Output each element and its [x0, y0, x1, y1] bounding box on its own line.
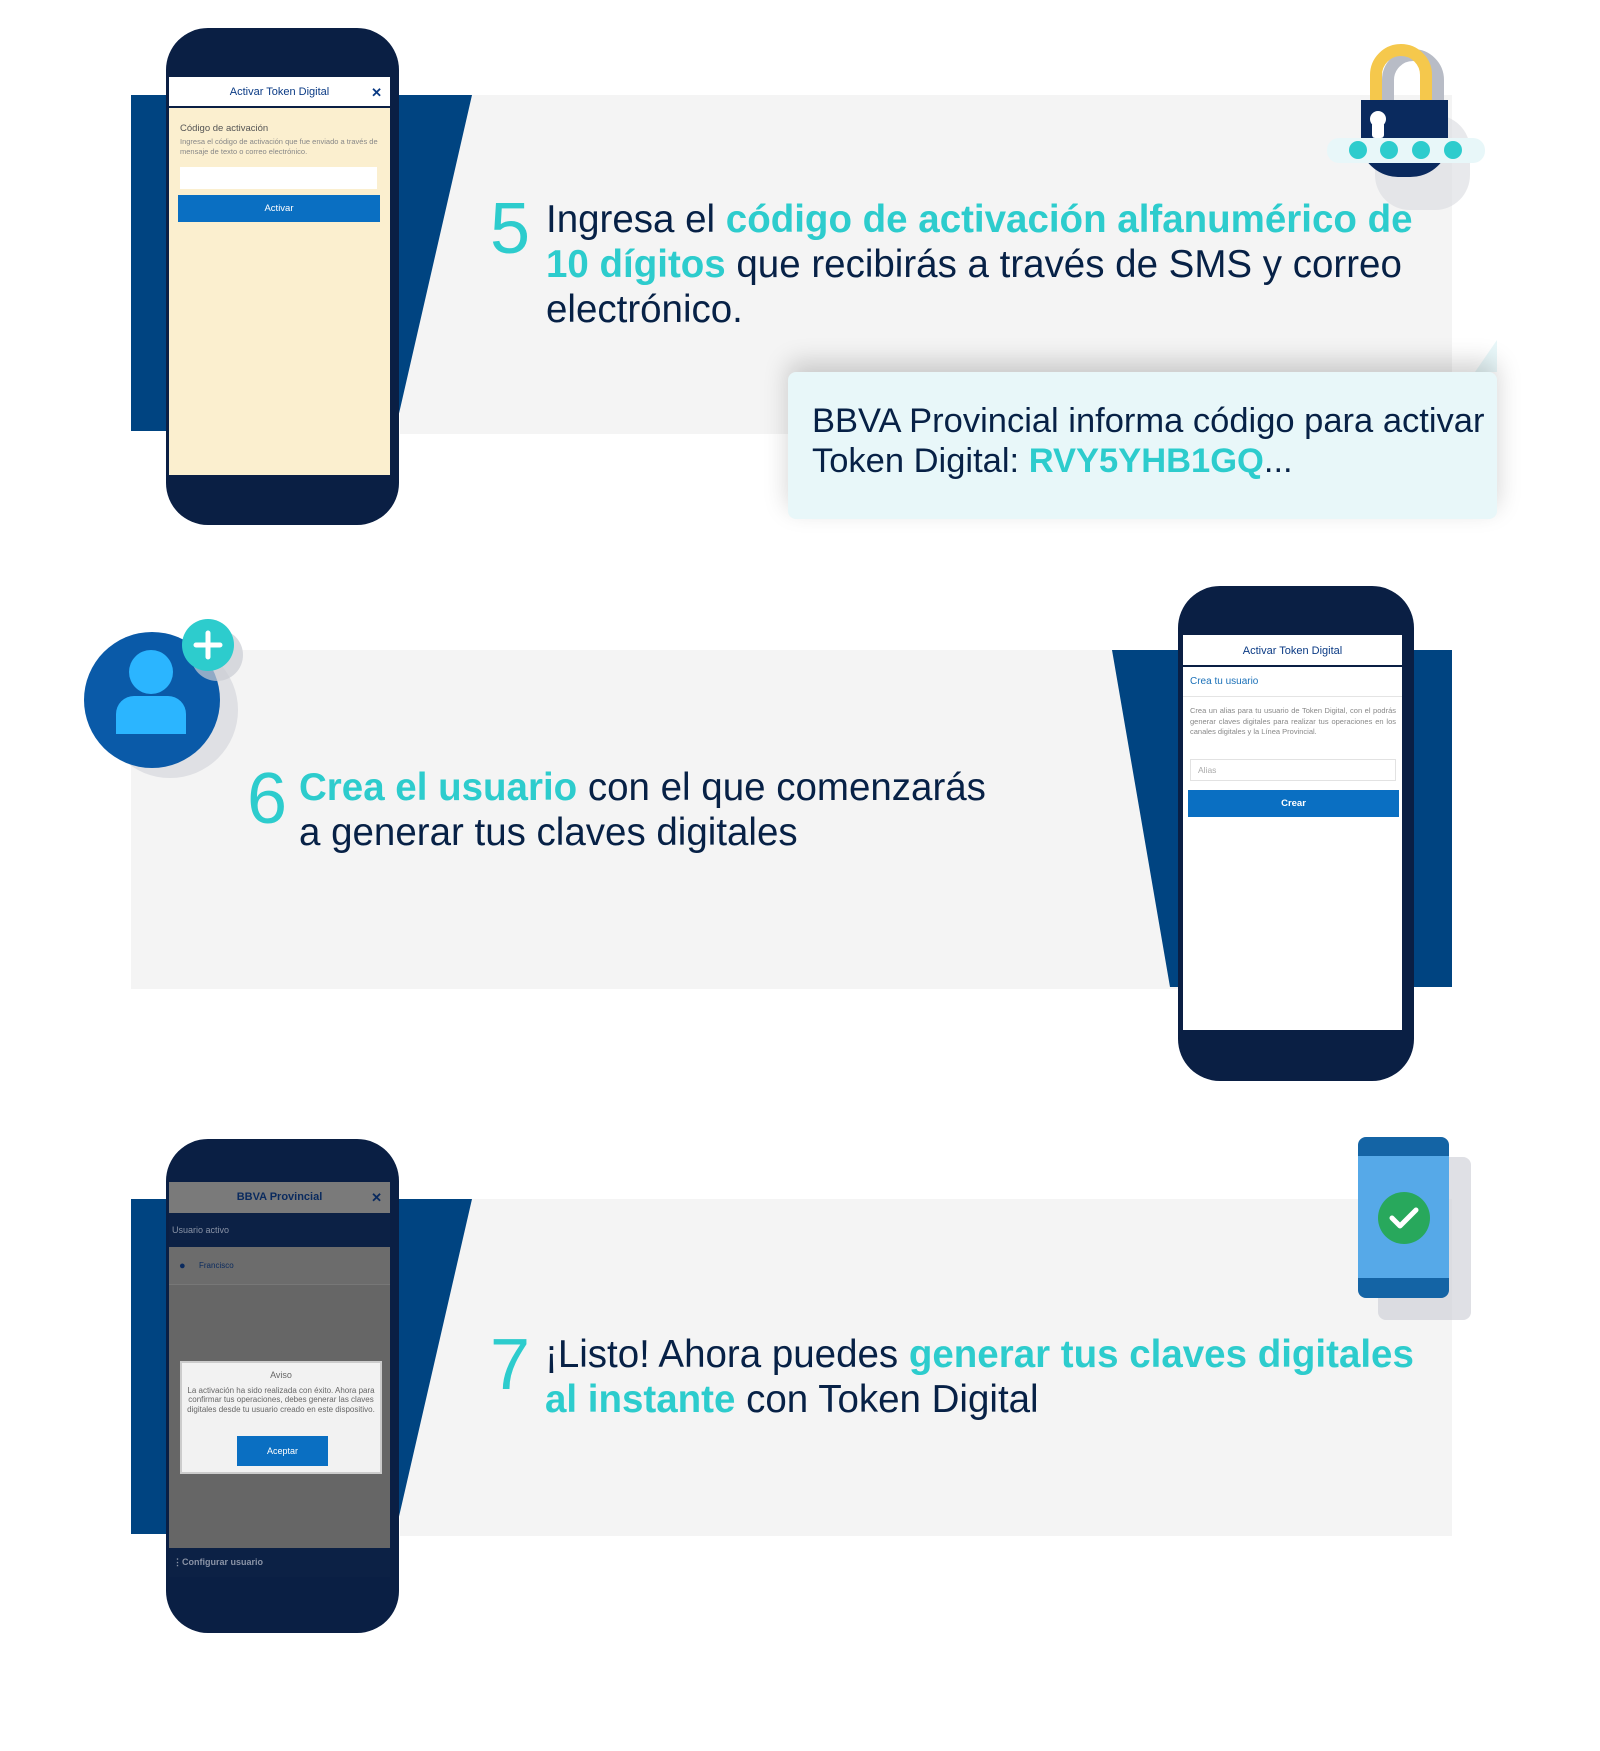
section 7	[131, 1137, 1471, 1633]
screen: create user: Activar Token Digital	[1243, 645, 1342, 657]
step number 5: 5	[490, 189, 530, 269]
screen: create user: Crea un alias para tu usuario de Token Digital, con el podrás generar claves digitales para realizar tus operaciones en los canales digitales y la Línea Provincial.	[1190, 706, 1396, 736]
text step 5: electrónico.	[546, 288, 743, 331]
screen: success dialog: Aceptar	[267, 1446, 298, 1456]
text step 5: Ingresa el código de activación alfanumérico de	[546, 198, 1413, 241]
phone step 6	[1178, 586, 1414, 1081]
blue band step 7	[131, 1199, 472, 1534]
screen: activation code: ✕	[371, 85, 382, 100]
text step 7: ¡Listo! Ahora puedes generar tus claves digitales	[545, 1333, 1414, 1376]
text step 7	[545, 1333, 1414, 1421]
screen: success dialog: La activación ha sido realizada con éxito. Ahora para confirmar tus operaciones, debes generar las claves digitales desde tu usuario creado en este dispositivo.	[187, 1386, 375, 1414]
text step 5	[546, 198, 1413, 331]
icon: padlock	[1327, 44, 1485, 210]
text step 5: 10 dígitos que recibirás a través de SMS y correo	[546, 243, 1402, 286]
panel: step 6 background	[131, 650, 1231, 989]
section 5	[131, 28, 1508, 525]
text step 7: al instante con Token Digital	[545, 1378, 1039, 1421]
icon: phone with check	[1358, 1137, 1471, 1320]
screen: success dialog: ✕	[371, 1190, 382, 1205]
phone step 7	[166, 1139, 399, 1633]
section 6	[84, 586, 1452, 1081]
blue band step 6	[1112, 650, 1452, 987]
screen: success dialog: Aviso	[270, 1370, 292, 1380]
screen: success dialog: ⋮	[173, 1557, 182, 1567]
screen: create user: Crear	[1281, 798, 1306, 809]
icon: add user	[84, 619, 243, 778]
screen: activation code	[169, 77, 390, 475]
screen: create user: Alias	[1198, 765, 1216, 775]
text step 6: Crea el usuario con el que comenzarás	[299, 766, 986, 809]
phone step 5	[166, 28, 399, 525]
screen: activation code: Código de activación	[180, 123, 268, 134]
screen: create user	[1183, 635, 1402, 1030]
callout: SMS message: BBVA Provincial informa código para activar	[812, 402, 1484, 440]
screen: activation code: Ingresa el código de activación que fue enviado a través de mensaje de texto o correo electrónico.	[180, 137, 378, 156]
screen: create user: Crea tu usuario	[1190, 676, 1258, 687]
step number 6: 6	[247, 759, 287, 839]
screen: activation code: Activar	[264, 203, 294, 214]
screen: success dialog: Configurar usuario	[182, 1557, 263, 1567]
panel: step 7 background	[400, 1199, 1452, 1536]
step number 7: 7	[490, 1325, 530, 1405]
screen: success dialog: Francisco	[199, 1261, 234, 1270]
screen: success dialog	[169, 1182, 390, 1577]
callout: SMS message	[778, 340, 1508, 520]
screen: success dialog: Usuario activo	[172, 1225, 229, 1235]
blue band step 5	[131, 95, 472, 431]
text step 6: a generar tus claves digitales	[299, 811, 798, 854]
text step 6	[299, 766, 986, 854]
screen: activation code: Activar Token Digital	[230, 86, 329, 98]
callout: SMS message: Token Digital: RVY5YHB1GQ...	[812, 442, 1293, 480]
panel: step 5 background	[400, 95, 1452, 434]
screen: success dialog: ●	[179, 1260, 186, 1272]
screen: success dialog: BBVA Provincial	[237, 1191, 322, 1203]
